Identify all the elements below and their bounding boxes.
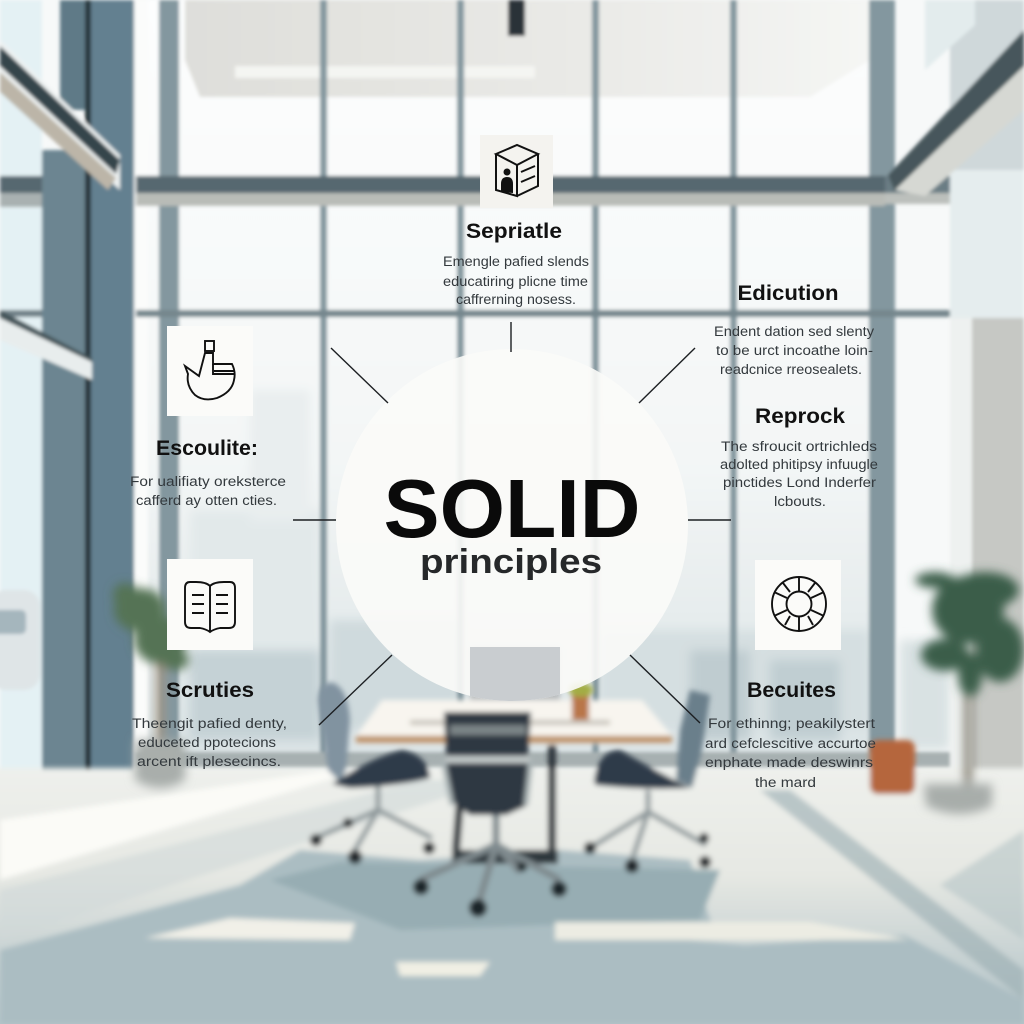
text block: readcnice rreosealets. — [720, 362, 862, 377]
text block: The sfroucit ortrichleds — [721, 439, 877, 454]
background: monitor — [470, 647, 560, 703]
heading: Escoulite: — [156, 437, 258, 460]
text block: Theengit pafied denty, — [132, 716, 287, 731]
text block — [443, 254, 589, 307]
text block: For ethinng; peakilystert — [708, 716, 875, 731]
title: SOLID — [384, 462, 640, 555]
background: left window wall — [0, 0, 42, 780]
text block: cafferd ay otten cties. — [136, 493, 277, 508]
background: ceiling panel — [185, 0, 870, 97]
background: floor shadows — [0, 850, 1024, 1024]
text block — [714, 324, 874, 377]
heading: Becuites — [747, 679, 836, 702]
title: principles — [420, 543, 602, 581]
background: horizontal mullions — [136, 176, 885, 193]
icon: box with person — [480, 135, 553, 208]
text block — [132, 716, 287, 769]
text block: adolted phitipsy infuugle — [720, 457, 878, 472]
text block: arcent ift plesecincs. — [137, 754, 281, 769]
icon: open book — [167, 559, 253, 650]
heading: Sepriatle — [466, 220, 562, 243]
panel: Scruties — [132, 559, 287, 769]
heading: Edicution — [738, 282, 838, 305]
text block — [720, 439, 878, 509]
text block: to be urct incoathe loin- — [716, 343, 873, 358]
text block: Emengle pafied slends — [443, 254, 589, 269]
text block: enphate made deswinrs — [705, 755, 873, 770]
text block: the mard — [755, 775, 816, 790]
background: plant on left — [113, 583, 189, 788]
panel: Reprock — [720, 405, 878, 509]
background: right chair — [584, 690, 711, 873]
background: right wall — [950, 0, 1024, 170]
text block: lcbouts. — [774, 494, 826, 509]
text block — [705, 716, 876, 790]
text block: pinctides Lond Inderfer — [723, 475, 877, 490]
text block: educeted ppotecions — [138, 735, 276, 750]
background: side planter — [870, 740, 915, 794]
text block: For ualifiaty oreksterce — [130, 474, 286, 489]
panel: Sepriatle — [443, 135, 589, 307]
text block — [130, 474, 286, 508]
text block: educatiring plicne time — [443, 274, 588, 289]
background: distant city in lower windows — [190, 390, 950, 750]
text block: caffrerning nosess. — [456, 292, 576, 307]
panel: Edicution — [714, 282, 874, 377]
connector lines — [293, 322, 731, 725]
text block: Endent dation sed slenty — [714, 324, 874, 339]
background: parked car — [0, 590, 40, 690]
background: hanging lamp — [508, 0, 525, 36]
heading: Scruties — [166, 679, 254, 702]
text block: ard cefclescitive accurtoe — [705, 736, 876, 751]
background: center chair — [413, 712, 567, 917]
heading: Reprock — [755, 405, 845, 428]
panel: Becuites — [705, 560, 876, 790]
icon: hand with block — [167, 326, 253, 416]
background: floor — [0, 768, 1024, 1024]
background: vertical mullions — [159, 0, 895, 760]
background: left chair — [310, 683, 435, 864]
background: table — [356, 700, 672, 744]
central circle — [336, 349, 688, 703]
icon: wheel — [755, 560, 841, 650]
background: plant on right — [915, 572, 1024, 814]
panel: Escoulite — [130, 326, 286, 508]
